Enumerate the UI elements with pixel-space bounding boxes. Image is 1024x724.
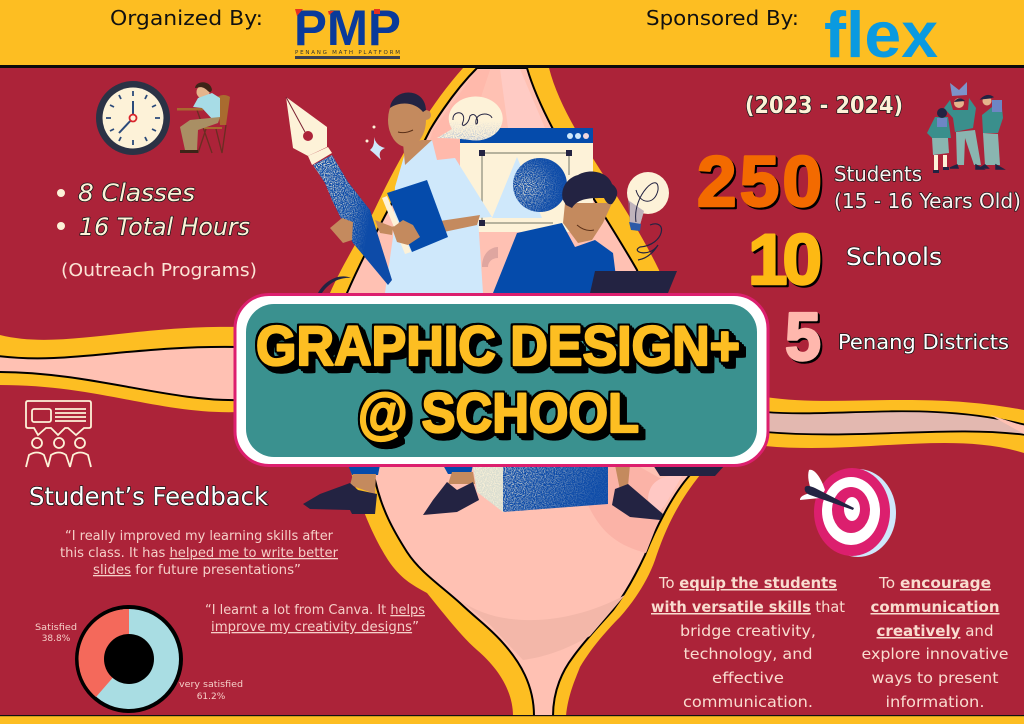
quote: learning skills [60, 529, 339, 578]
quote: learning skills: slides for future presentations” [93, 563, 301, 578]
illustration: students group [927, 82, 1003, 173]
text: objective two: creatively and [876, 622, 994, 640]
quote: learning skills: “I really improved my learning skills after [65, 529, 334, 544]
heading: organized by: Organized By: [110, 6, 263, 30]
stat: students: 250 [697, 143, 822, 222]
illustration: lower legs, box and shoes [303, 465, 725, 520]
chart label: satisfied: 38.8% [42, 634, 71, 644]
stat: schools: Schools [846, 243, 942, 271]
footer bar [0, 715, 1024, 724]
chart label: satisfied [35, 623, 77, 644]
icon: seated student [177, 82, 230, 153]
header bar [0, 0, 1024, 68]
quote: canva: “I learnt a lot from Canva. It helps [205, 603, 425, 618]
text: objective one: communication. [683, 693, 813, 711]
background: flowing shape [330, 68, 700, 716]
quote: learning skills: this class. It has helped me to write better [60, 546, 339, 561]
stat: districts: Penang Districts [838, 330, 1009, 354]
illustration: speech bubble [437, 97, 503, 141]
quote: canva [205, 603, 425, 635]
chart label: very satisfied: 61.2% [197, 692, 226, 702]
title text: @ SCHOOL [358, 381, 639, 444]
text: years: (2023 - 2024) [745, 93, 903, 119]
title panel [235, 294, 768, 466]
band: right wave [765, 397, 1024, 453]
text: objective one: To equip the students [658, 574, 837, 592]
text: objective one: technology, and [684, 645, 812, 663]
list: class stats: 8 Classes [78, 179, 195, 207]
stat: students: Students [834, 162, 922, 186]
chart label: satisfied: Satisfied [35, 623, 77, 633]
text: outreach programs: (Outreach Programs) [61, 260, 257, 281]
text: objective two: communication [870, 598, 1000, 616]
icon: target with arrow [800, 468, 896, 557]
icon: feedback audience [26, 401, 91, 467]
text: objective one: bridge creativity, [680, 622, 816, 640]
logo: PMP: PMP [294, 0, 401, 56]
heading: sponsored by: Sponsored By: [646, 6, 799, 30]
stat: students [697, 143, 1021, 222]
stat: students: (15 - 16 Years Old) [834, 189, 1021, 213]
list: class stats [57, 179, 250, 241]
chart label: very satisfied: very satisfied [179, 680, 243, 690]
quote: canva: improve my creativity designs ” [211, 620, 419, 635]
text: objective one: effective [712, 669, 784, 687]
stat: schools: 10 [748, 221, 822, 300]
logo: PMP: PENANG MATH PLATFORM [295, 50, 400, 56]
text: objective two: ways to present [872, 669, 999, 687]
title text: GRAPHIC DESIGN+ [256, 314, 740, 377]
icon: clock [96, 81, 170, 155]
list: class stats: 16 Total Hours [79, 213, 250, 241]
text: objective two: information. [886, 693, 984, 711]
title text [256, 314, 740, 444]
logo: flex: flex [824, 0, 938, 71]
text: objective one [651, 574, 845, 711]
text: objective two: explore innovative [862, 645, 1008, 663]
stat: districts [785, 299, 1009, 375]
stat: schools [748, 221, 942, 300]
illustration: design window [460, 128, 593, 232]
text: objective one: with versatile skills that [651, 598, 845, 616]
stat: districts: 5 [785, 299, 821, 375]
band: left wave [0, 327, 240, 412]
chart label: very satisfied [179, 680, 243, 702]
heading: student's feedback: Student’s Feedback [29, 482, 269, 511]
illustration: man with laptop [493, 172, 677, 293]
illustration: man with pen [286, 92, 492, 293]
donut chart: satisfaction [35, 605, 243, 713]
icon: light bulb [627, 172, 669, 260]
text: objective two [862, 574, 1008, 711]
text: objective two: To encourage [878, 574, 991, 592]
